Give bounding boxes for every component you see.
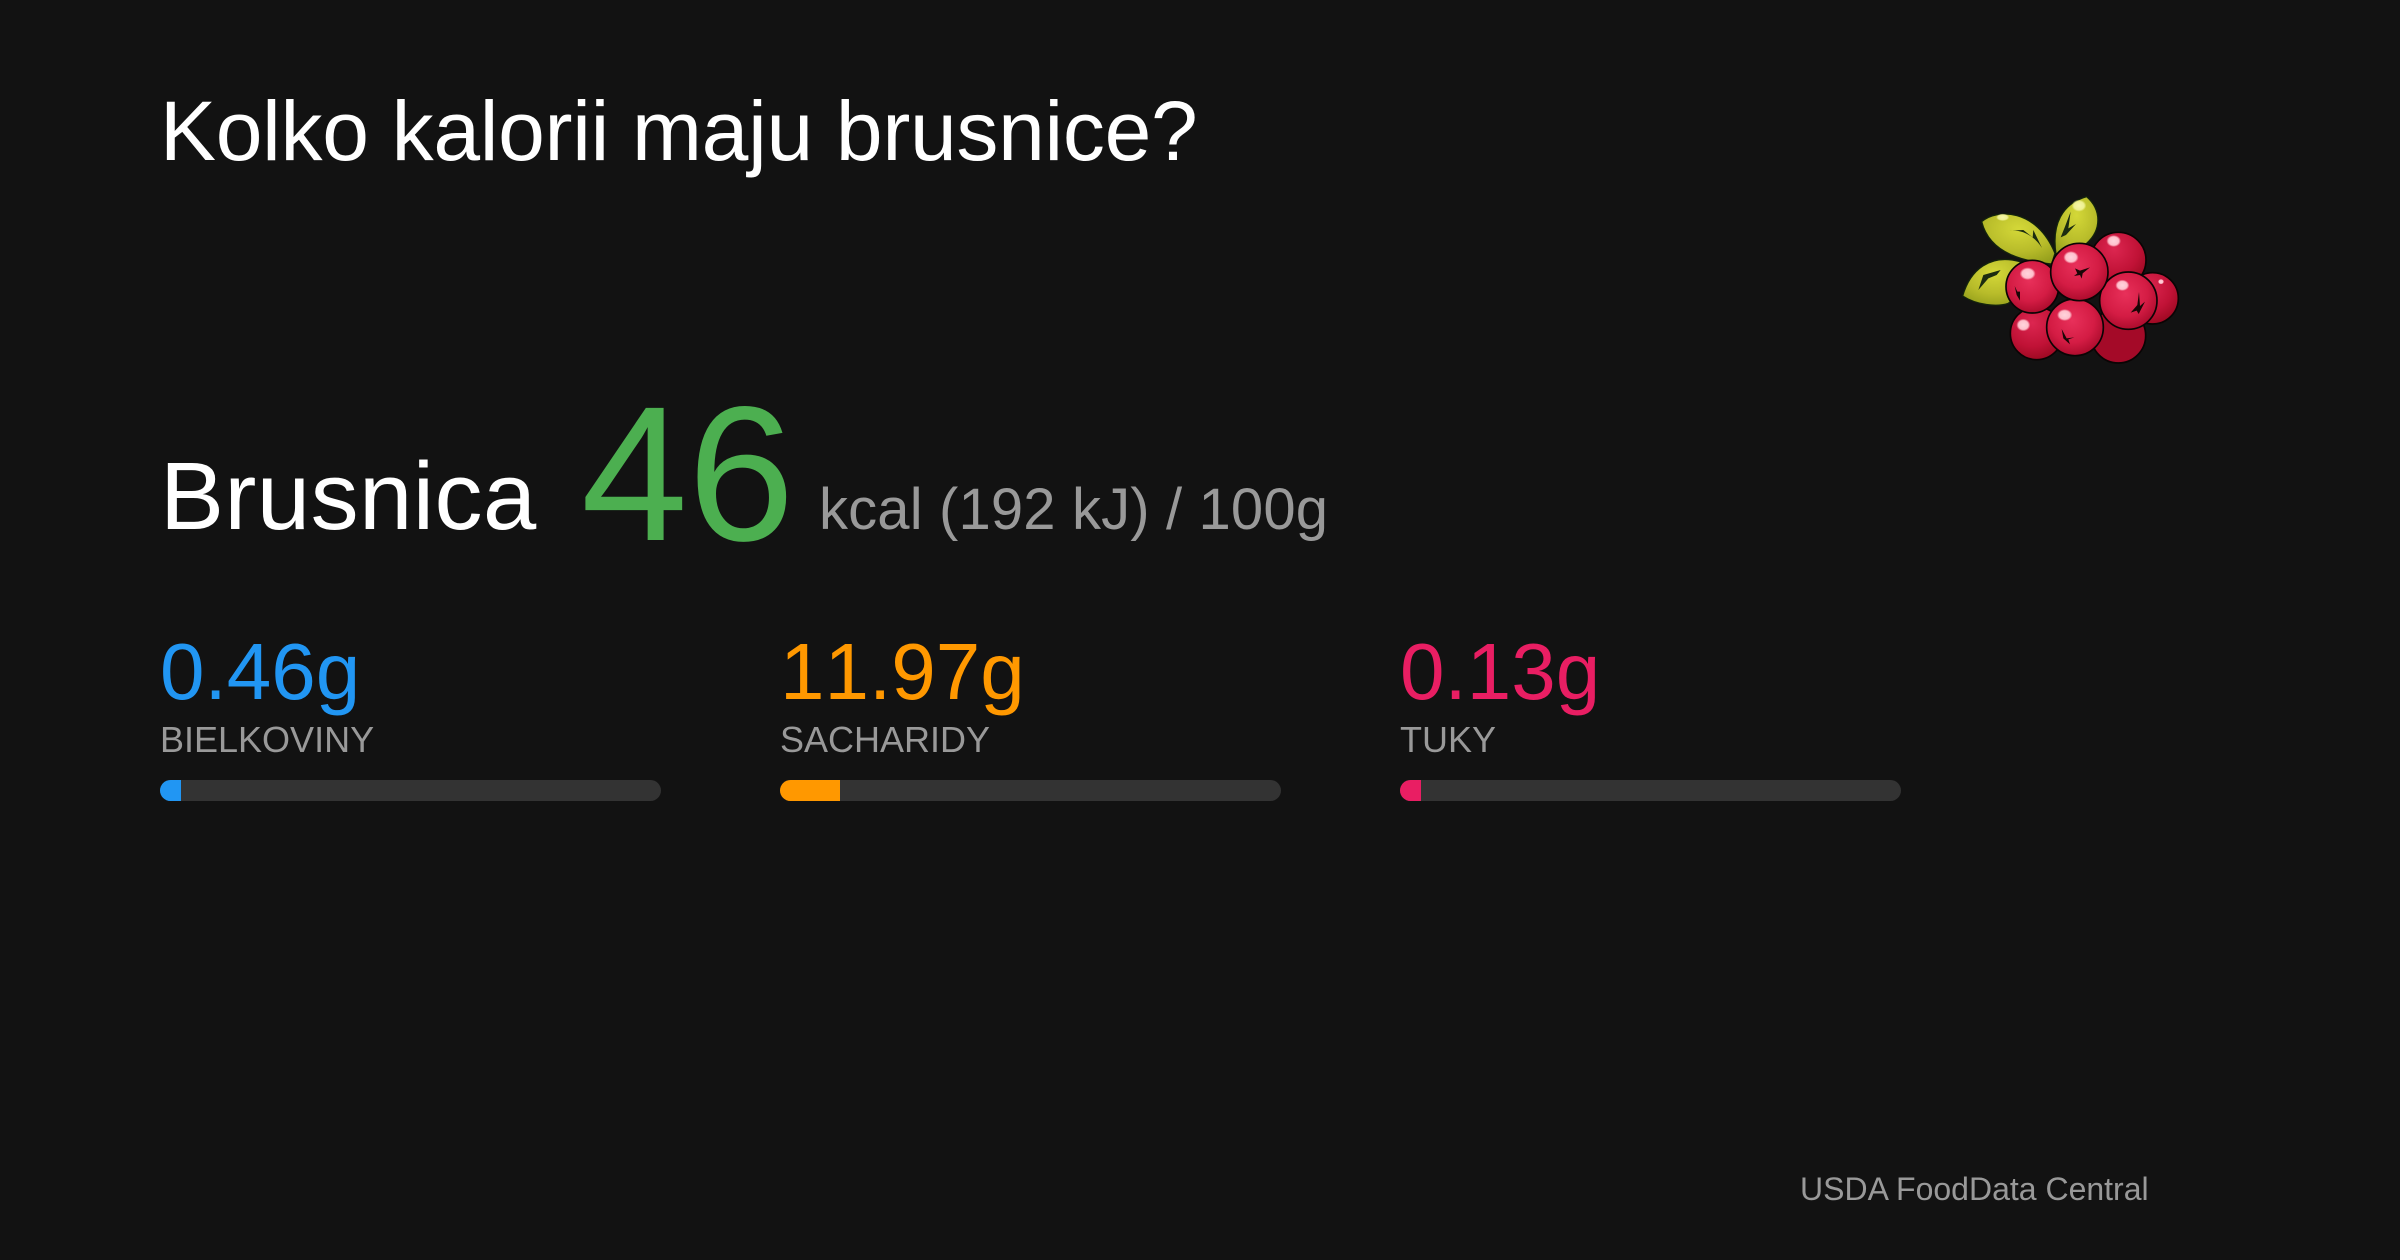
protein label: BIELKOVINY [160,718,374,760]
icon: cranberries [1962,196,2179,364]
fat value: 0.13g [1400,627,1600,716]
panel: protein [160,627,661,801]
food name: Brusnica [160,443,537,550]
protein bar [160,780,661,801]
calorie unit: kcal (192 kJ) / 100g [819,477,1328,542]
source note: USDA FoodData Central [1800,1171,2149,1207]
leaves [1963,197,2098,305]
carbohydrates value: 11.97g [780,627,1025,716]
fat bar [1400,780,1901,801]
carbohydrates label: SACHARIDY [780,718,990,760]
panel: fat [1400,627,1901,801]
carbohydrates bar [780,780,1281,801]
fat label: TUKY [1400,718,1496,760]
title: Kolko kalorii maju brusnice? [160,84,1197,178]
protein value: 0.46g [160,627,360,716]
panel: carbohydrates [780,627,1281,801]
berries [2006,232,2178,363]
calorie value: 46 [581,366,795,581]
